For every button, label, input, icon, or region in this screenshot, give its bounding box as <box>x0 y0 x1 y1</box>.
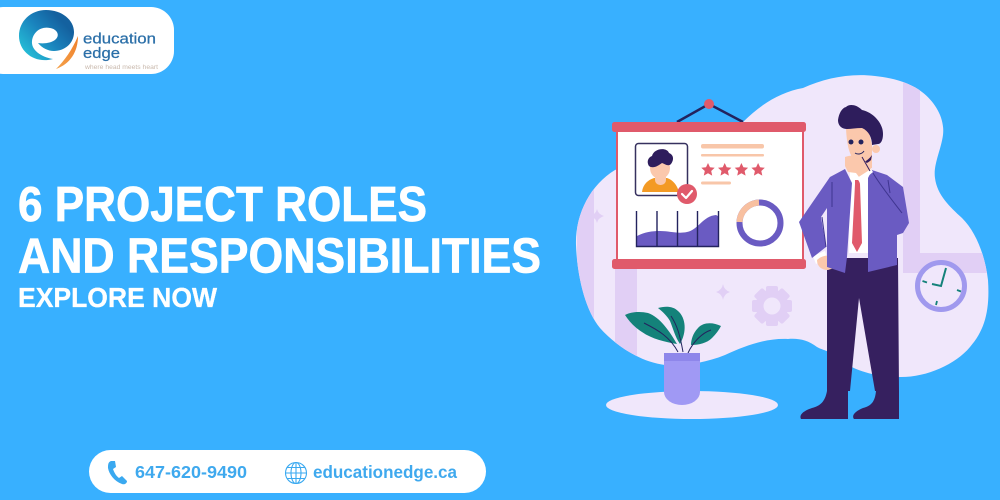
logo wordmark: education <box>83 30 156 48</box>
check badge <box>677 184 697 204</box>
phone number: 647-620-9490 <box>135 462 247 482</box>
trousers and shoes <box>800 258 899 419</box>
illustration: background blob <box>576 70 993 377</box>
profile card <box>636 144 688 196</box>
logo badge <box>0 7 174 74</box>
title <box>18 178 541 284</box>
hand on chin <box>845 156 872 181</box>
plant leaves <box>625 307 721 353</box>
donut chart <box>740 202 780 244</box>
logo wordmark: edge <box>83 45 120 62</box>
jacket right panel <box>868 170 909 272</box>
area chart <box>636 211 718 246</box>
presentation board <box>612 99 806 269</box>
icon: globe <box>286 462 306 484</box>
icon: phone <box>108 461 127 484</box>
icon: sparkles <box>590 209 730 300</box>
logo wordmark: where head meets heart <box>84 65 158 71</box>
jacket fold lines <box>822 173 902 247</box>
hand on hip <box>817 256 834 270</box>
subheading: explore now: EXPLORE NOW <box>18 282 218 313</box>
pot <box>664 353 700 405</box>
star rating <box>701 163 765 176</box>
shirt cuff <box>813 251 827 264</box>
eyes and smile <box>848 140 864 154</box>
title: 6 PROJECT ROLES <box>18 178 427 232</box>
text lines <box>701 144 764 184</box>
floor ellipse <box>606 391 778 419</box>
clock <box>918 262 964 310</box>
tie <box>852 180 862 252</box>
hair <box>838 105 883 145</box>
contact bar <box>89 450 486 493</box>
shirt <box>849 170 874 253</box>
face <box>846 128 872 162</box>
icon: education edge swirl <box>19 10 78 69</box>
plant <box>606 307 778 419</box>
neck and ear <box>858 150 872 168</box>
logo wordmark <box>83 30 158 71</box>
board hanger <box>677 99 743 122</box>
title: AND RESPONSIBILITIES <box>18 230 541 284</box>
icon: gear <box>752 286 792 326</box>
icon: orange swoosh <box>56 36 78 69</box>
sleeve cuff <box>857 169 873 183</box>
jacket left panel <box>799 169 852 273</box>
beard line <box>862 155 872 163</box>
website: educationedge.ca <box>313 462 457 482</box>
businessman <box>799 105 909 419</box>
